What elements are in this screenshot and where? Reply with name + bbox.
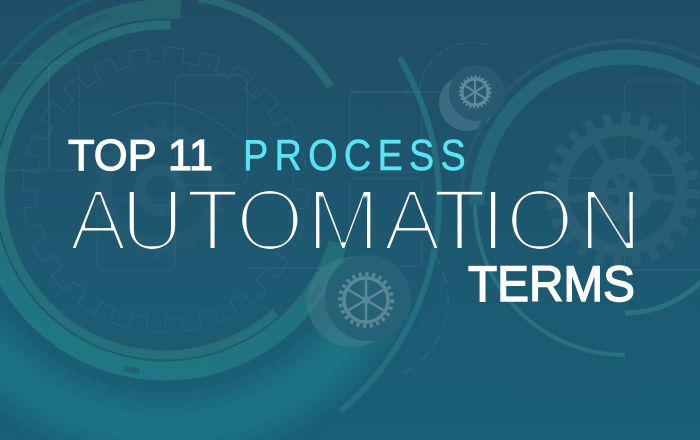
bottom dashed arc: [252, 186, 480, 414]
top dashed arc: [415, 39, 529, 153]
top small gear badge: [439, 65, 505, 131]
left small solid gear: [95, 103, 240, 255]
title: [68, 130, 642, 312]
right large gear: [551, 119, 693, 261]
left gear outline: [31, 56, 299, 324]
large sweeping arc: [0, 0, 542, 440]
right rings: [447, 27, 700, 383]
bottom small gear badge: [307, 255, 411, 347]
title line: automation: AUTOMATION: [69, 172, 642, 269]
title line: process: PROCESS: [243, 130, 466, 180]
left rings: [0, 0, 481, 440]
title line: top 11: TOP 11: [68, 131, 213, 180]
process outlines: [0, 63, 700, 272]
title line: terms: TERMS: [468, 256, 635, 312]
